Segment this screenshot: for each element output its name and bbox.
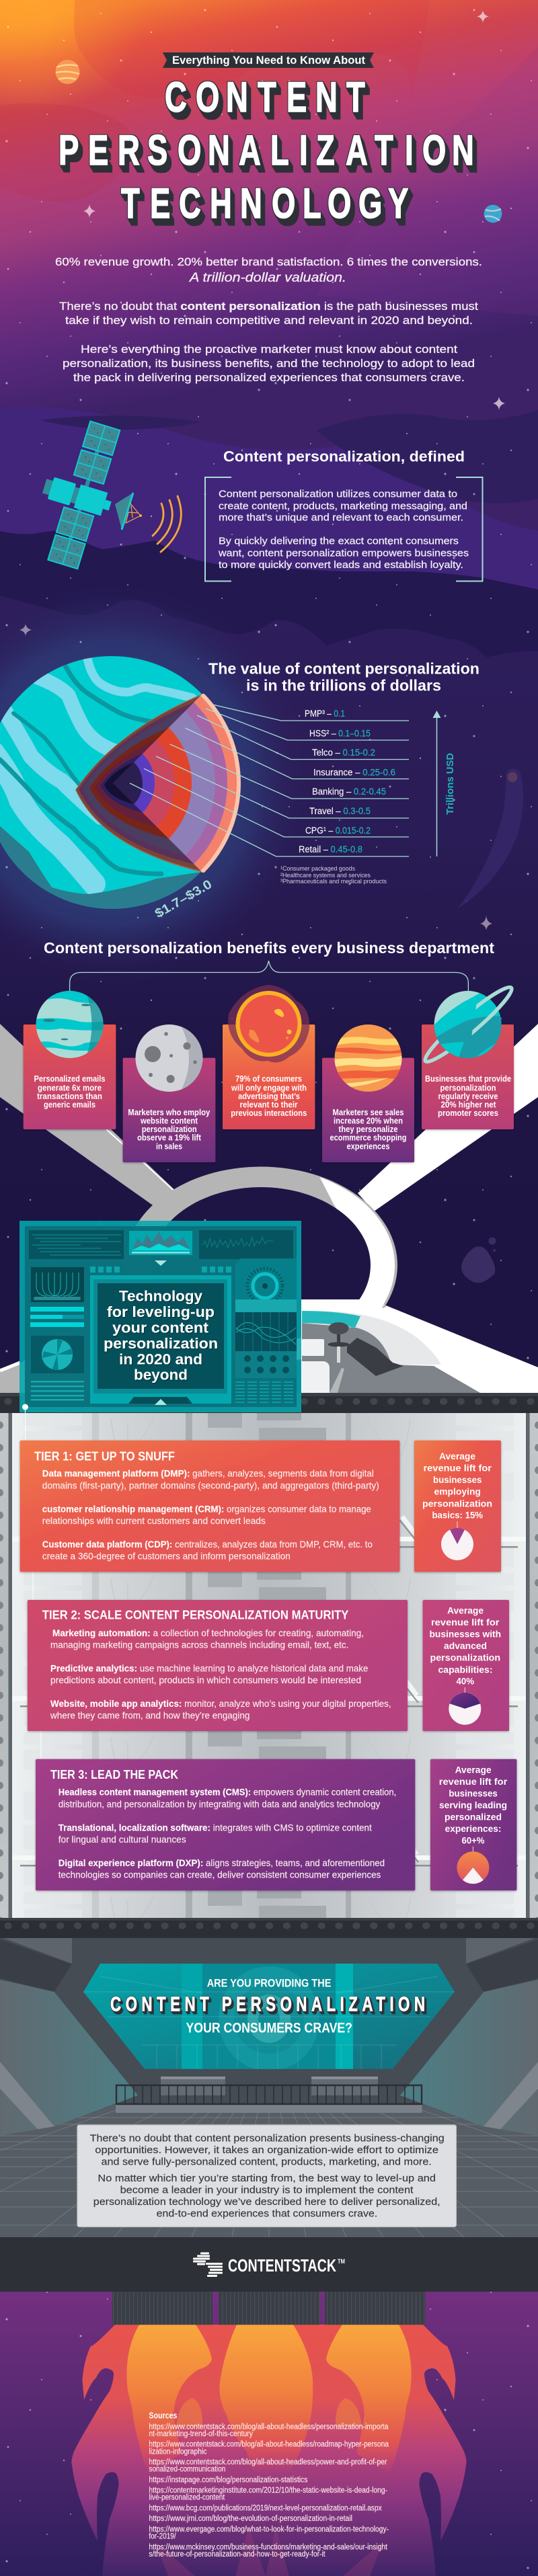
chart: cutaway planet of market value [0,652,241,921]
panel: tier 3 [36,1759,415,1890]
pie chart: 15% [441,1521,473,1560]
panel: main screen call to action: YOUR CONSUMERS CRAVE? [186,2020,352,2036]
panel: tier 2 revenue lift: 40% [456,1677,474,1687]
leader lines and industry labels [130,705,409,856]
card 1: transactions than [37,1092,102,1101]
panel: tier 2: predictions about content, products in which consumers would be interested [50,1675,361,1685]
leader lines and industry labels: Retail – 0.45-0.8 [299,844,362,854]
panel: tier 1 [20,1441,399,1572]
heading: benefits every business department: Content personalization benefits every business department [44,939,494,957]
panel: tier 3: Headless content management system (CMS): empowers dynamic content creation, [59,1787,396,1798]
card 4: ecommerce shopping [330,1133,406,1142]
pie chart: 60+% [457,1847,489,1884]
panel: closing text [77,2125,457,2227]
card 5: 20% higher net [441,1100,496,1109]
panel: definition bracket box: create content, products, marketing messaging, and [219,500,467,512]
leader lines and industry labels: CPG¹ – 0.015-0.2 [305,826,371,836]
panel: tier 1 revenue lift [414,1441,501,1572]
panel: tier 2 revenue lift: capabilities: [438,1664,492,1675]
sources: s/the-future-of-personalization-and-how-to-get-ready-for-it [149,2550,325,2559]
railing and platform [116,2085,422,2113]
panel: tier 1: TIER 1: GET UP TO SNUFF [34,1449,175,1463]
heading: technology for leveling-up: for leveling-up [107,1303,215,1320]
card 3: relevant to their [239,1100,298,1109]
panel: tier 2: Marketing automation: a collection of technologies for creating, automating, [52,1627,364,1638]
panel: tier 3 revenue lift: personalized [445,1812,502,1822]
icon: satellite [24,414,181,573]
footer bar with Contentstack logo: CONTENTSTACK [228,2255,336,2276]
icon: striped orange planet [55,60,79,84]
card 5: regularly receive [438,1092,498,1101]
icon: asteroid [461,1237,496,1283]
floor with grid [0,2104,538,2237]
panel: tier 3 revenue lift: 60+% [461,1835,484,1845]
flames [71,2325,467,2576]
icon: sparkle stars [20,10,505,930]
panel: tier 2: Predictive analytics: use machine learning to analyze historical data and make [50,1663,369,1674]
panel: tier 3: for lingual and cultural nuances [59,1834,186,1845]
footer bar with Contentstack logo: TM [338,2258,345,2265]
panel: tier 3: technologies so companies can create, deliver consistent consumer experiences [59,1869,381,1880]
intro text: A trillion-dollar valuation. [189,271,346,285]
card 5: personalization [440,1084,496,1093]
intro text: There’s no doubt that content personalization is the path businesses must [59,300,478,313]
panel: tier 2 revenue lift: Average [447,1605,484,1615]
label: $1.7-$3.0: $1.7–$3.0 [153,877,215,921]
card 4 [322,1022,414,1162]
arrow: trillions USD axis [433,711,456,856]
leader lines and industry labels: Banking – 0.2-0.45 [312,787,386,797]
intro text: the pack in delivering personalized experiences that consumers crave. [73,371,465,384]
panel: definition bracket box: want, content personalization empowers businesses [218,547,469,559]
card 1: generate 6x more [38,1084,102,1093]
heading: content personalization, defined: Content personalization, defined [223,448,465,465]
card 4: they personalize [339,1125,398,1134]
panel: definition bracket box: to more quickly convert leads and establish loyalty. [219,559,463,571]
panel: tier 2 revenue lift [423,1600,509,1731]
leader lines and industry labels: PMP³ – 0.1 [305,709,345,719]
sources: https://www.mckinsey.com/business-functions/marketing-and-sales/our-insight [149,2543,388,2551]
banner: everything you need to know: Everything You Need to Know About [172,54,365,67]
bottom space background [0,2292,538,2576]
panel: tier 1 revenue lift: revenue lift for [424,1463,492,1473]
card 3: will only engage with [231,1084,307,1093]
card 3: 79% of consumers [235,1074,302,1084]
card 3: previous interactions [231,1109,307,1118]
panel: tier 3 revenue lift: serving leading [439,1800,507,1810]
sources: lization-infographic [149,2448,207,2456]
heading: value of content personalization: The value of content personalization [208,660,479,678]
panel: tier 1: create a 360-degree of customers and inform personalization [42,1551,291,1562]
intro text: take if they wish to remain competitive and relevant in 2020 and beyond. [65,314,473,327]
card 1 [24,988,116,1129]
dark strip below wall [0,1918,538,1938]
panel: main screen call to action [83,1964,455,2071]
card 2 [123,1024,215,1162]
icon: up arrow [155,1399,167,1405]
panel: technology holographic console [20,1221,301,1412]
panel: tier 3: TIER 3: LEAD THE PACK [50,1768,178,1781]
panel: main screen call to action: CONTENT PERSONALIZATION [110,1993,425,2016]
heading: technology for leveling-up [104,1288,218,1383]
sources: sonalized-communication [149,2466,225,2474]
intro text: 60% revenue growth. 20% better brand satisfaction. 6 times the conversions. [55,255,482,268]
leader lines and industry labels: HSS² – 0.1–0.15 [309,729,371,739]
title [59,73,474,227]
footnotes: ¹Consumer packaged goods [280,865,355,873]
connector lines between tiers [22,1404,44,1764]
spaceship window frame [0,1024,538,1395]
footnotes: ³Pharmaceuticals and medical products [280,878,387,885]
panel: closing text: No matter which tier you’re starting from, the best way to level-up and [98,2173,436,2184]
icon: down arrow [155,1260,167,1266]
card 1: generic emails [44,1100,95,1109]
panel: benefit cards [24,981,517,1162]
card 5: promoter scores [438,1109,498,1118]
heading: value of content personalization: is in the trillions of dollars [246,677,441,694]
panel: tier 1 revenue lift: basics: 15% [432,1511,483,1521]
sources: https://www.jrni.com/blog/the-evolution-of-personalization-in-retail [149,2515,352,2523]
heading: technology for leveling-up: your content [112,1319,209,1336]
panel: tier 1: domains (first-party), partner domains (second-party), and aggregators (third-party) [42,1480,379,1490]
sources: for-2019/ [149,2533,176,2541]
heading: technology for leveling-up: in 2020 and [119,1351,202,1367]
sources: live-personalized-content [149,2494,225,2502]
sub: cut faces of planet [75,694,202,873]
panel: tier 1 revenue lift: personalization [422,1498,492,1508]
intro text: personalization, its business benefits, and the technology to adopt to lead [63,357,475,370]
panel: tier 3 revenue lift: experiences: [445,1824,501,1834]
title: CONTENT [165,73,365,121]
title: TECHNOLOGY [121,179,408,227]
card 4: Marketers see sales [332,1108,404,1117]
panel: tier 2: TIER 2: SCALE CONTENT PERSONALIZATION MATURITY [42,1609,348,1622]
panel: tier 2: where they came from, and how they’re engaging [50,1710,249,1721]
panel: closing text: opportunities. However, it takes an organization-wide effort to optimize [95,2144,438,2156]
intro text: Here’s everything the proactive marketer must know about content [81,343,457,356]
panel: main screen call to action: ARE YOU PROVIDING THE [207,1977,331,1990]
icon: comet [457,768,523,909]
panel: tier 2 revenue lift: personalization [430,1653,500,1663]
leader lines and industry labels: Telco – 0.15-0.2 [312,748,375,758]
icon: stacked logo mark [193,2252,223,2277]
panel: tier 2 [28,1600,408,1731]
card 2: website content [140,1117,198,1126]
sources: https://contentmarketinginstitute.com/2012/10/the-static-website-is-dead-long- [149,2487,387,2495]
card 2: Marketers who employ [128,1108,210,1117]
panel: tier 3 revenue lift: revenue lift for [439,1777,508,1787]
heading: value of content personalization [208,660,479,694]
card 5: Businesses that provide [425,1074,511,1084]
intro text [55,255,482,384]
arrow: trillions USD axis: Trillions USD [445,753,456,815]
icon: small blue planet [484,205,502,223]
panel: tier 2 revenue lift: advanced [444,1641,487,1651]
sources [149,2410,389,2559]
sub: cross-section bands [113,694,241,873]
panel: tier 2 revenue lift: businesses with [429,1629,501,1640]
panel: tier 3 revenue lift: businesses [449,1788,498,1798]
card 1: Personalized emails [34,1074,106,1084]
panel: closing text: personalization technology we’ve described here to deliver personalized, [93,2196,440,2208]
panel: tier 2: Website, mobile app analytics: monitor, analyze who’s using your digital properties, [50,1698,391,1709]
background: space gradient [0,0,538,1398]
sources: Sources [149,2410,177,2420]
dark strip above wall [0,1393,538,1413]
bracket connecting heading to cards [70,961,468,991]
card 2: in sales [156,1141,182,1151]
panel: tier 1 revenue lift: Average [439,1451,476,1461]
panel: definition bracket box: By quickly delivering the exact content consumers [219,536,459,547]
panel: tier 3: Translational, localization software: integrates with CMS to optimize content [59,1822,372,1833]
card 4: increase 20% when [334,1117,403,1126]
panel: closing text: end-to-end experiences that consumers crave. [157,2208,377,2220]
panel: tier 1: Data management platform (DMP): gathers, analyzes, segments data from digital [42,1468,374,1479]
footnotes [280,865,387,885]
sources: https://www.contentstack.com/blog/all-about-headless/power-and-profit-of-per [149,2458,387,2466]
sources: https://www.evergage.com/blog/what-to-look-for-in-personalization-technology- [149,2526,389,2534]
panel: tier 1: Customer data platform (CDP): centralizes, analyzes data from DMP, CRM, etc. to [42,1539,373,1549]
panel: tier 3 revenue lift: Average [455,1765,492,1775]
card 4: experiences [347,1141,390,1151]
heading: technology for leveling-up: personalization [104,1335,218,1352]
card 3: advertising that’s [238,1092,300,1101]
sources: https://www.contentstack.com/blog/all-about-headless/personalization-importa [149,2423,389,2431]
heading: technology for leveling-up: beyond [134,1367,188,1383]
panel: closing text: There’s no doubt that content personalization presents business-changing [90,2132,445,2144]
sources: https://www.bcg.com/publications/2019/next-level-personalization-retail.aspx [149,2504,382,2512]
leader lines and industry labels: Insurance – 0.25-0.6 [313,768,395,777]
panel: tier 1: relationships with current customers and convert leads [42,1515,266,1526]
pie chart: 40% [449,1687,481,1725]
panel: tier 2 revenue lift: revenue lift for [431,1617,500,1627]
footer bar with Contentstack logo [0,2237,538,2292]
card 3 [223,985,315,1129]
sources: nt-marketing-trend-of-this-century [149,2430,253,2438]
title: PERSONALIZATION [59,126,474,174]
panel: tier 1 revenue lift: employing [434,1487,481,1497]
panel: closing text: become a leader in your industry is to implement the content [120,2184,414,2196]
panel: tier 3: Digital experience platform (DXP): aligns strategies, teams, and aforementioned [59,1857,385,1868]
engine nozzles [112,2292,426,2325]
heading: technology for leveling-up: Technology [119,1288,203,1305]
sources: https://www.contentstack.com/blog/all-about-headless/roadmap-hyper-persona [149,2441,389,2449]
panel: tier 2: managing marketing campaigns across channels including email, text, etc. [50,1640,348,1650]
wall: interior panels [0,1412,538,1918]
panel: tier 3 revenue lift [430,1759,516,1890]
panel: tier 1: customer relationship management (CRM): organizes consumer data to manage [42,1503,371,1514]
panel: definition bracket box [205,477,483,581]
sources: https://instapage.com/blog/personalization-statistics [149,2476,308,2484]
card 2: personalization [142,1125,197,1134]
panel: closing text: and serve fully-personalized content, products, marketing, and more. [101,2156,432,2167]
panel: definition bracket box: Content personalization utilizes consumer data to [219,488,457,499]
card 5 [420,981,517,1129]
panel: definition bracket box: more that’s unique and relevant to each consumer. [219,512,463,524]
footnotes: ²Healthcare systems and services [280,872,371,879]
card 2: observe a 19% lift [137,1133,202,1142]
panel: tier 1 revenue lift: businesses [433,1475,482,1485]
icon: signal arcs [153,496,181,552]
room: bridge interior [0,1938,538,2237]
panel: tier 3: distribution, and personalization by integrating with data and analytics technology [59,1798,380,1809]
cockpit dashboard and seat [302,1311,480,1393]
leader lines and industry labels: Travel – 0.3-0.5 [309,806,371,816]
